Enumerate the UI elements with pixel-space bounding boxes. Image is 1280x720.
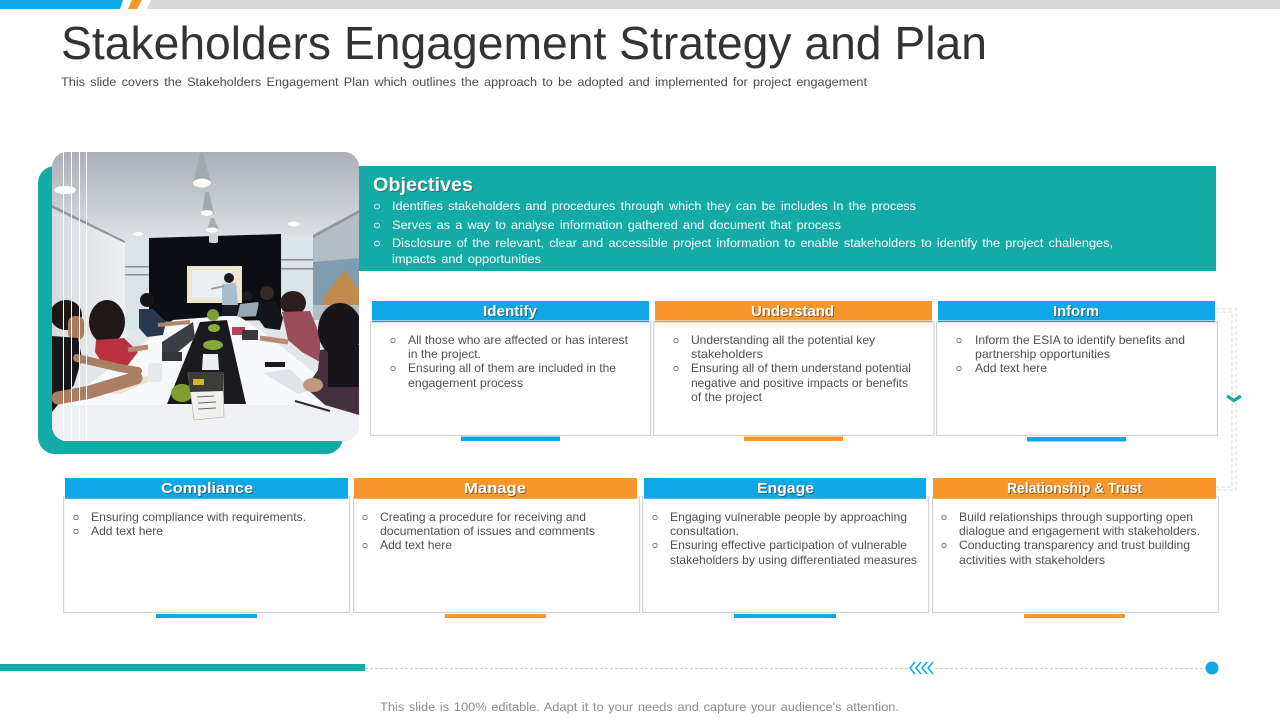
card: Relationship and Trust: activities with stakeholders: [959, 553, 1105, 567]
card: Manage: documentation of issues and comments: [380, 524, 595, 538]
card: Compliance: Compliance: [161, 480, 253, 497]
presenter: [224, 273, 234, 283]
panel: objectives: [358, 166, 1216, 271]
card: Engage: stakeholders by using differentiated measures: [670, 553, 917, 567]
card: Relationship and Trust: Conducting transparency and trust building: [959, 538, 1190, 552]
card: Manage: [354, 478, 640, 618]
card: Engage: Engage: [757, 480, 814, 497]
objectives heading: Objectives: [373, 175, 473, 196]
card: Manage: Manage: [464, 480, 526, 497]
card: Manage: Creating a procedure for receiving and: [380, 510, 586, 524]
photo: team meeting in conference room: [38, 152, 362, 454]
card: Engage: Ensuring effective participation of vulnerable: [670, 538, 907, 552]
objectives list: [375, 199, 1113, 266]
card: Understand: Ensuring all of them understand potential: [691, 361, 911, 375]
card: Compliance: Add text here: [91, 524, 163, 538]
card: Engage: [643, 478, 929, 618]
card: Relationship and Trust: Build relationships through supporting open: [959, 510, 1193, 524]
objectives list: Identifies stakeholders and procedures through which they can be includes In the process: [392, 199, 916, 213]
attendees: [140, 293, 154, 307]
card: Inform: partnership opportunities: [975, 347, 1110, 361]
white vertical lines: [64, 152, 86, 441]
card: Identify: Ensuring all of them are included in the: [408, 361, 616, 375]
card: Relationship and Trust: dialogue and engagement with stakeholders.: [959, 524, 1200, 538]
card: Understand: negative and positive impacts or benefits: [691, 376, 908, 390]
table placard: [188, 373, 224, 420]
card: Identify: Identify: [483, 303, 538, 320]
card: Relationship and Trust: Relationship & Trust: [1007, 480, 1142, 497]
card: Compliance: Ensuring compliance with requirements.: [91, 510, 306, 524]
card: Engage: Engaging vulnerable people by approaching: [670, 510, 907, 524]
lamps: [193, 153, 211, 183]
card: Inform: Add text here: [975, 361, 1047, 375]
card: Understand: Understanding all the potential key: [691, 333, 875, 347]
card: Relationship and Trust: [933, 478, 1219, 618]
card: Compliance: [64, 478, 350, 618]
card: Engage: consultation.: [670, 524, 739, 538]
card: Identify: [371, 301, 651, 441]
card: Inform: Inform the ESIA to identify benefits and: [975, 333, 1185, 347]
title: Stakeholders Engagement Strategy and Plan: [61, 17, 987, 69]
objectives list: Disclosure of the relevant, clear and accessible project information to enable stakeholders to identify the project challenges,: [392, 236, 1113, 250]
subtitle: This slide covers the Stakeholders Engagement Plan which outlines the approach to be adopted and implemented for project engagement: [61, 75, 868, 89]
icon: chevrons: [908, 661, 934, 675]
laptops and objects: [162, 322, 195, 352]
table: [52, 315, 325, 441]
card: Identify: All those who are affected or has interest: [408, 333, 629, 347]
footer progress line: [0, 661, 1218, 675]
card: Manage: Add text here: [380, 538, 452, 552]
card: Identify: engagement process: [408, 376, 523, 390]
card: Inform: [937, 301, 1217, 442]
card: Understand: of the project: [691, 390, 763, 404]
objectives list: Serves as a way to analyse information gathered and document that process: [392, 218, 841, 232]
footer note: This slide is 100% editable. Adapt it to your needs and capture your audience's attention.: [380, 700, 899, 714]
card: Identify: in the project.: [408, 347, 481, 361]
icon: connector chevron: [1227, 396, 1241, 400]
top accent bars: [0, 0, 1280, 9]
card: Understand: Understand: [751, 303, 834, 320]
icon: end dot: [1206, 662, 1218, 674]
card: Inform: Inform: [1053, 303, 1099, 320]
connector: dashed link between rows: [1216, 309, 1236, 490]
objectives list: impacts and opportunities: [392, 252, 541, 266]
card: Understand: [654, 301, 934, 441]
card: Understand: stakeholders: [691, 347, 763, 361]
